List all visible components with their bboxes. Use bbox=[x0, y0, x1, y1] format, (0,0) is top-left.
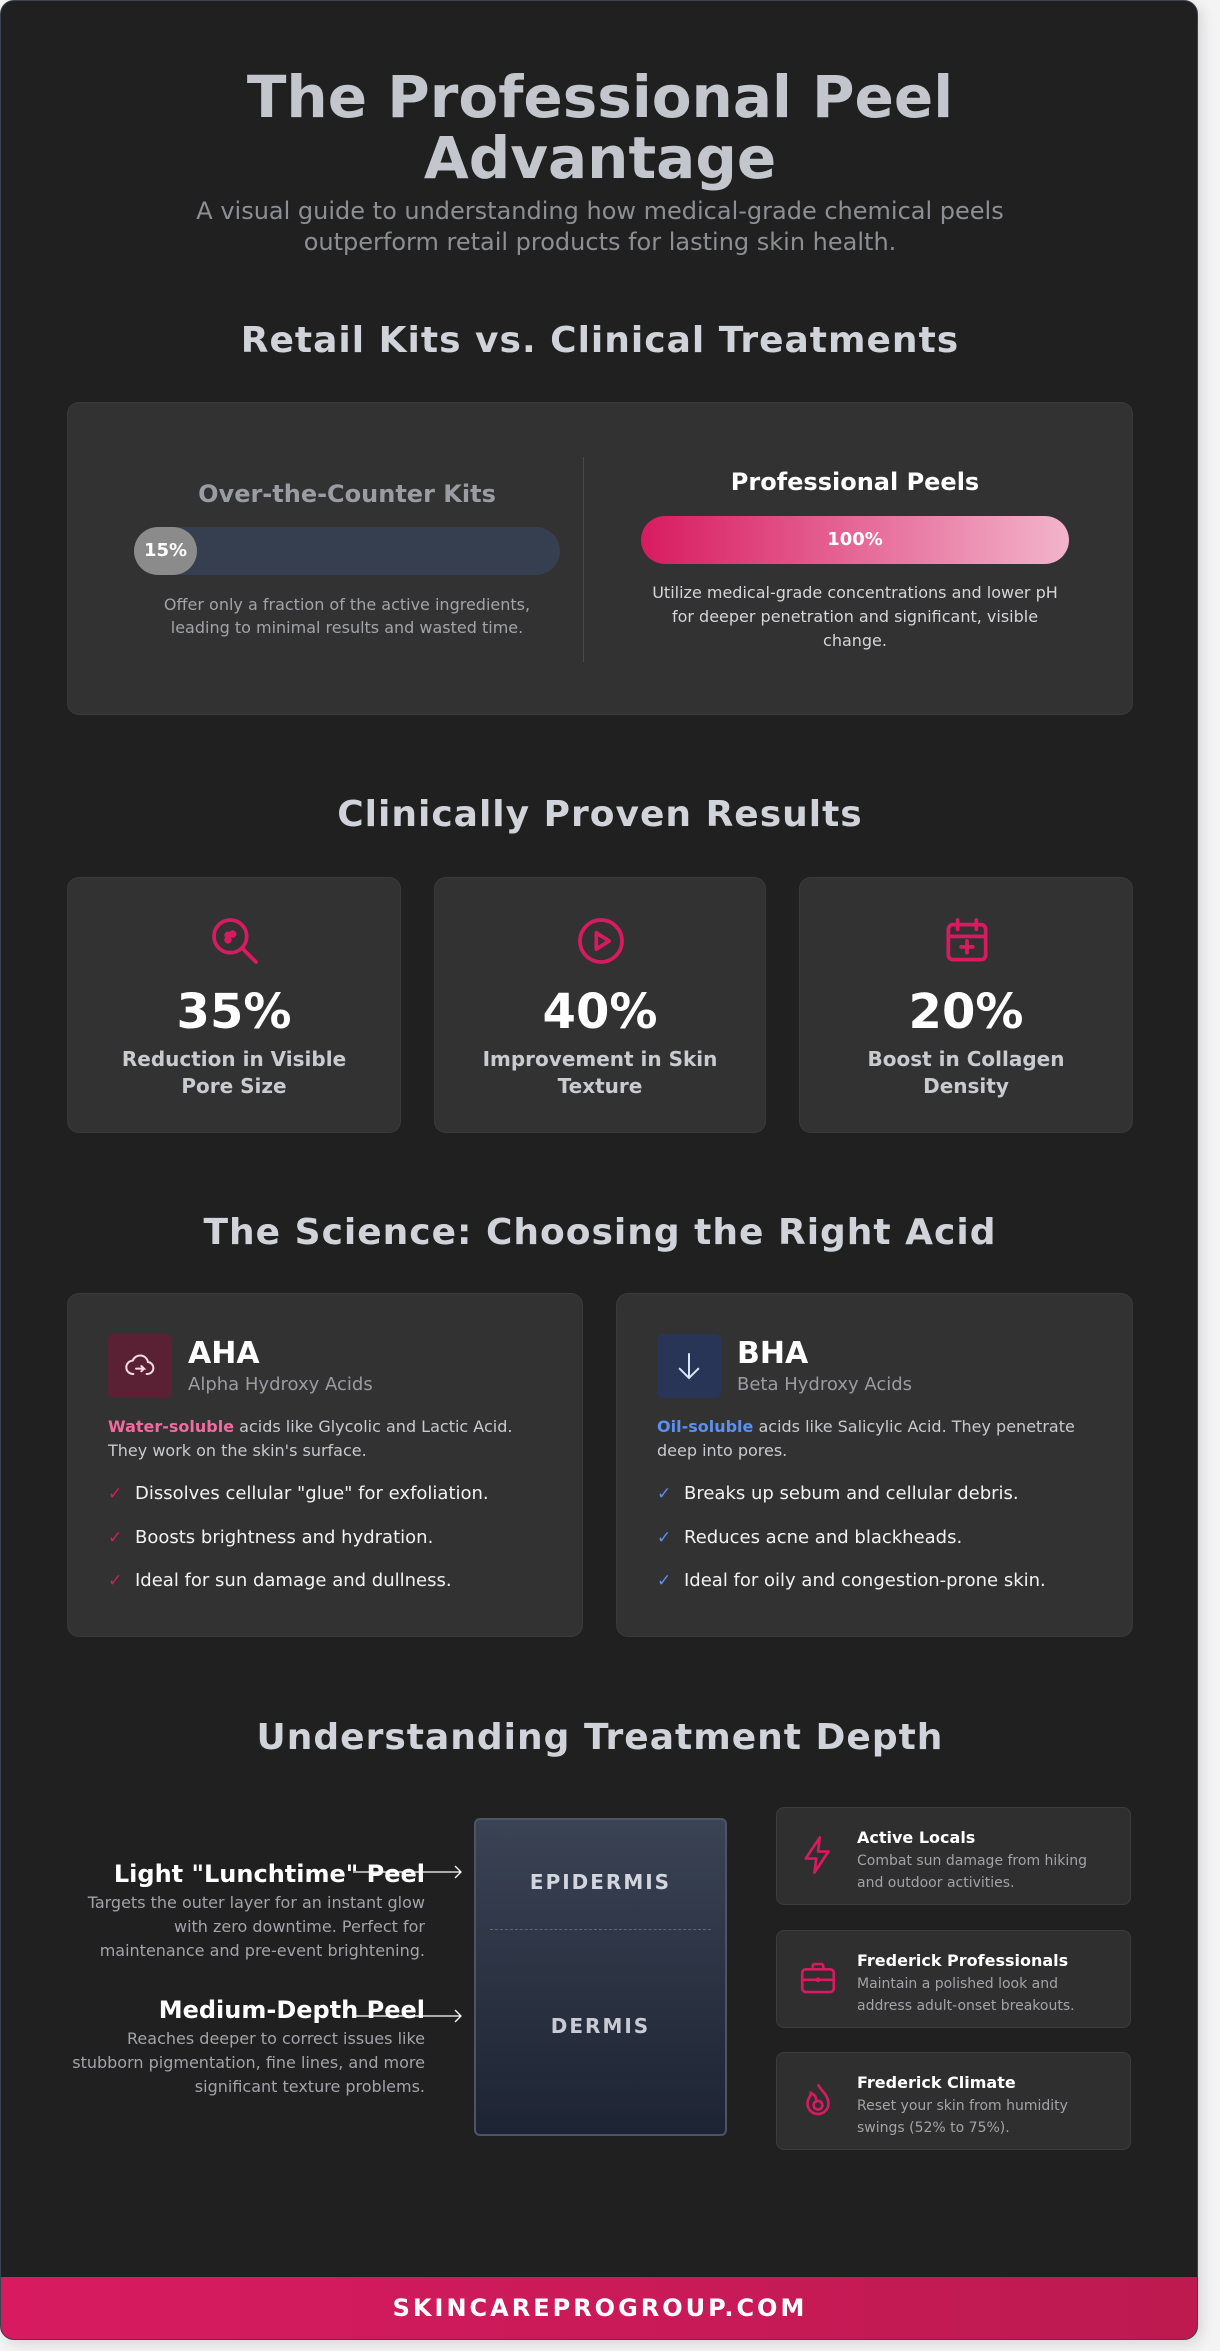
bar: 100% bbox=[641, 516, 1069, 564]
diagram: skin layers: EPIDERMIS bbox=[530, 1870, 671, 1894]
bullets: Breaks up sebum and cellular debris. bbox=[684, 1483, 1019, 1504]
OTC column: Over-the-Counter Kits bbox=[198, 480, 496, 508]
text: medium peel: significant texture problems. bbox=[195, 2077, 425, 2096]
bullets: ✓ bbox=[657, 1484, 671, 1504]
text: medium peel: Reaches deeper to correct issues like bbox=[127, 2029, 425, 2048]
icon: calendar bbox=[946, 918, 988, 962]
diagram: skin layers: DERMIS bbox=[551, 2014, 650, 2038]
panel: BHA bbox=[616, 1293, 1133, 1637]
stat card 1: Pore Size bbox=[181, 1074, 287, 1098]
heading: retail vs clinical: Retail Kits vs. Clinical Treatments bbox=[241, 320, 959, 361]
diagram: skin layers bbox=[474, 1818, 727, 2136]
panel: BHA: Oil-soluble acids like Salicylic Acid. They penetrate bbox=[657, 1417, 1075, 1436]
panel: AHA: Alpha Hydroxy Acids bbox=[188, 1374, 373, 1395]
panel: BHA: deep into pores. bbox=[657, 1441, 787, 1460]
icon: magnifier bbox=[212, 918, 258, 964]
panel: BHA: ✓ bbox=[657, 1571, 671, 1591]
professional column: Professional Peels bbox=[731, 468, 979, 496]
title bbox=[247, 63, 953, 192]
stat card 2: 40% bbox=[543, 984, 657, 1040]
stat card 3 bbox=[799, 877, 1133, 1133]
icon: play bbox=[578, 918, 624, 964]
text: medium peel: Medium-Depth Peel bbox=[159, 1996, 425, 2024]
subtitle: outperform retail products for lasting skin health. bbox=[304, 228, 896, 256]
professional column: for deeper penetration and significant, visible bbox=[672, 607, 1038, 626]
stat card 1 bbox=[67, 877, 401, 1133]
panel: AHA: Boosts brightness and hydration. bbox=[135, 1527, 433, 1548]
card: frederick climate: Reset your skin from humidity swings (52% to 75%). bbox=[857, 2098, 1068, 2136]
icon: AHA bbox=[108, 1334, 172, 1398]
OTC column: Offer only a fraction of the active ingredients, bbox=[164, 595, 530, 614]
professional column: change. bbox=[823, 631, 887, 650]
text: light peel bbox=[88, 1860, 425, 1960]
bar: 15%: 15% bbox=[144, 540, 187, 561]
stat card 1: Reduction in Visible bbox=[122, 1047, 346, 1071]
bar: 15% bbox=[134, 527, 560, 575]
panel: AHA: AHA bbox=[188, 1336, 260, 1371]
professional column: Utilize medical-grade concentrations and lower pH bbox=[652, 583, 1058, 602]
panel: AHA: ✓ bbox=[108, 1528, 122, 1548]
text: medium peel: stubborn pigmentation, fine lines, and more bbox=[72, 2053, 425, 2072]
panel: BHA: ✓ bbox=[657, 1528, 671, 1548]
panel: BHA: Ideal for oily and congestion-prone skin. bbox=[684, 1570, 1046, 1591]
footer bbox=[1, 2277, 1199, 2341]
panel: AHA bbox=[67, 1293, 583, 1637]
card: frederick climate bbox=[776, 2052, 1131, 2150]
bullets: ✓ bbox=[108, 1484, 122, 1504]
heading: depth: Understanding Treatment Depth bbox=[257, 1717, 943, 1758]
panel: BHA: Reduces acne and blackheads. bbox=[684, 1527, 962, 1548]
card: active locals: Combat sun damage from hiking and outdoor activities. bbox=[857, 1853, 1087, 1891]
text: light peel: Light "Lunchtime" Peel bbox=[114, 1860, 425, 1888]
arrow: medium peel bbox=[356, 2010, 462, 2022]
card: frederick professionals bbox=[776, 1930, 1131, 2028]
panel: AHA: Water-soluble acids like Glycolic and Lactic Acid. bbox=[108, 1417, 512, 1436]
title: The Professional Peel bbox=[247, 63, 953, 131]
card: frederick professionals: Frederick Professionals bbox=[857, 1951, 1068, 1970]
card: active locals bbox=[776, 1807, 1131, 1905]
bar: 100%: 100% bbox=[827, 529, 883, 550]
OTC column bbox=[134, 480, 560, 637]
stat card 2 bbox=[434, 877, 766, 1133]
panel: BHA: Beta Hydroxy Acids bbox=[737, 1374, 912, 1395]
subtitle: A visual guide to understanding how medical-grade chemical peels bbox=[196, 197, 1004, 225]
text: light peel: with zero downtime. Perfect for bbox=[174, 1917, 425, 1936]
text: light peel: maintenance and pre-event brightening. bbox=[100, 1941, 425, 1960]
panel: AHA: Ideal for sun damage and dullness. bbox=[135, 1570, 452, 1591]
OTC column: leading to minimal results and wasted time. bbox=[171, 618, 523, 637]
footer: SKINCAREPROGROUP.COM bbox=[393, 2294, 807, 2322]
stat card 3: Boost in Collagen bbox=[868, 1047, 1064, 1071]
icon: BHA bbox=[657, 1334, 721, 1398]
stat card 2: Improvement in Skin bbox=[483, 1047, 717, 1071]
card: frederick professionals: Maintain a polished look and address adult-onset breakouts. bbox=[857, 1976, 1075, 2014]
professional column bbox=[641, 468, 1069, 650]
divider bbox=[583, 457, 584, 662]
panel: AHA: They work on the skin's surface. bbox=[108, 1441, 367, 1460]
bullets: Dissolves cellular "glue" for exfoliation. bbox=[135, 1483, 489, 1504]
stat card 3: Density bbox=[923, 1074, 1009, 1098]
stat card 1: 35% bbox=[177, 984, 291, 1040]
heading: results: Clinically Proven Results bbox=[337, 794, 863, 835]
stat card 3: 20% bbox=[909, 984, 1023, 1040]
title: Advantage bbox=[424, 124, 776, 192]
card: frederick climate: Frederick Climate bbox=[857, 2073, 1016, 2092]
panel: AHA: ✓ bbox=[108, 1571, 122, 1591]
heading: science: The Science: Choosing the Right Acid bbox=[204, 1212, 996, 1253]
panel: BHA: BHA bbox=[737, 1336, 808, 1371]
text: light peel: Targets the outer layer for an instant glow bbox=[88, 1893, 425, 1912]
stat card 2: Texture bbox=[558, 1074, 642, 1098]
card: active locals: Active Locals bbox=[857, 1828, 975, 1847]
arrow: light peel bbox=[353, 1866, 462, 1878]
panel: comparison bbox=[67, 402, 1133, 715]
subtitle bbox=[196, 197, 1004, 256]
text: medium peel bbox=[72, 1996, 425, 2096]
